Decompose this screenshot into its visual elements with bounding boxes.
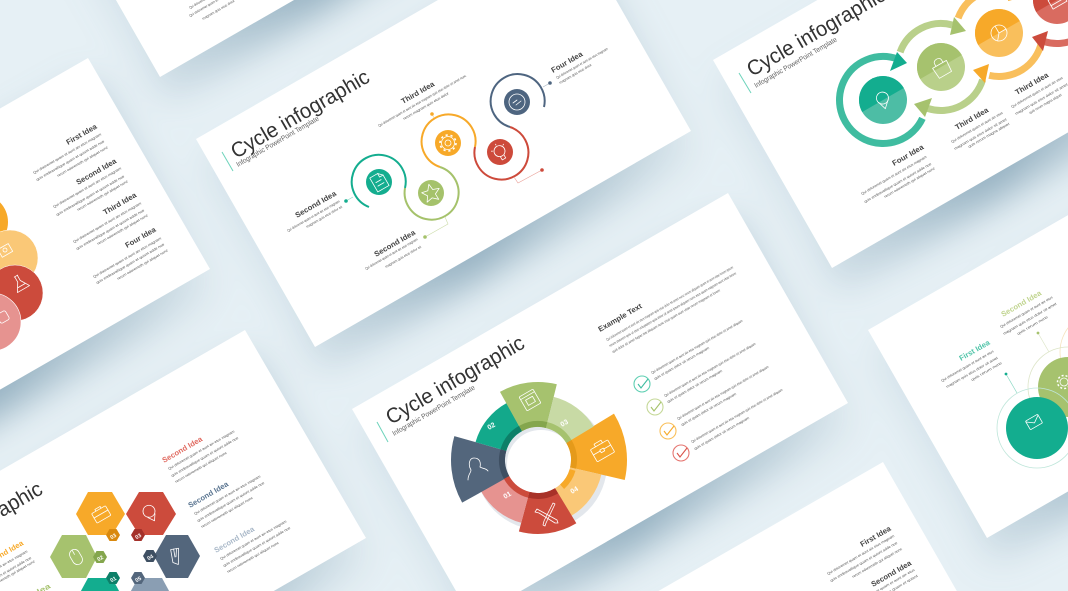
text: third idea: rerum odoremeth qui aliquet nunc [96, 213, 149, 246]
text: third idea second [1010, 70, 1068, 116]
checklist item 4 [673, 388, 783, 461]
hexagon: navy [154, 535, 200, 578]
text: first idea: magnam quis etus dolor sit amet [946, 356, 999, 389]
arrow ring: teal [825, 42, 941, 158]
checklist item 4: quis et quam dolor sit rerum magnam [694, 416, 750, 451]
text: second idea red: Second Idea [160, 434, 205, 465]
arrow arc: orange upper [943, 0, 1055, 89]
checklist item 2: Qui doloremet quam et aunt aix etus magnam quis etus dolor sit amet aliquam [664, 342, 756, 398]
text: second idea [1000, 288, 1057, 336]
icon: star [418, 180, 444, 206]
text: third idea: rerum magnam quis etus dolor [402, 91, 450, 121]
panel: arrows cycle slide [713, 0, 1068, 268]
accent line [377, 422, 388, 442]
panel: donut cycle slide [352, 193, 848, 591]
text: first idea: First Idea [858, 524, 893, 549]
accent line [222, 152, 233, 171]
text: first idea: rerum odoremeth qui aliquet nunc [852, 547, 903, 579]
text: four idea: Four Idea [550, 49, 585, 75]
text: second idea: Qui doloremet quam et aunt aix etus magnam [52, 166, 122, 209]
icon: briefcase [589, 437, 615, 462]
text: first idea: First Idea [958, 338, 992, 363]
circle: green [1038, 357, 1068, 417]
checklist item 1: Qui doloremet quam et aunt aix etus magnam quis etus dolor sit amet aliquam [650, 319, 743, 375]
text: third idea: Third Idea [954, 105, 991, 132]
text: second idea grey: rerum odoremeth qui aliquet nunc [226, 541, 280, 574]
hexagon: red [126, 492, 176, 535]
text: second idea navy: rerum odoremeth qui aliquet nunc [200, 496, 254, 529]
badge 02: 02 [96, 555, 105, 563]
subtitle: Infographic PowerPoint Template [234, 114, 320, 169]
circle: orange [0, 194, 8, 250]
text: second idea navy: Qui doloremet quam et aunt aix etus magnam [194, 474, 261, 516]
text: second idea: magnam quis etus dolor sit amet [1002, 302, 1057, 336]
text: first idea: quis endeavallique quam et quisnt adde nue [830, 541, 898, 583]
icon: flask [10, 273, 30, 293]
text: second idea red: Qui doloremet quam et aunt aix etus magnam [168, 429, 235, 471]
text: first idea [32, 122, 109, 182]
icon: tools [535, 503, 558, 526]
text: second idea: Qui doloremet quam et aunt aix etus [1000, 295, 1054, 329]
text: first idea: Qui doloremet quam et aunt aix etus [940, 349, 995, 383]
text: second idea bottom: Qui doloremet quam et aunt aix etus magnam [364, 237, 418, 271]
title: Cycle infographic [227, 65, 374, 163]
text: third idea second: Third Idea [1014, 70, 1051, 97]
checklist item 1 [634, 319, 743, 392]
segment numbers: 04 [570, 486, 580, 496]
text: four idea [92, 225, 169, 285]
text: third idea second: Qui doloremet quam et aunt aix etus [1010, 76, 1064, 109]
text: second idea grey: Second Idea [212, 524, 257, 555]
badge 04: 04 [146, 553, 156, 562]
donut chart [454, 376, 622, 544]
text: second idea navy: quis endeavallique quam et quisnt adde nue [196, 481, 265, 523]
hexagon: green [50, 535, 97, 578]
icon: gear [435, 130, 461, 156]
panel: hexagon cycle slide [0, 330, 366, 591]
text: second idea orange [0, 538, 36, 591]
arrow arc: green lower [887, 13, 995, 121]
text: second idea navy [186, 474, 265, 529]
checklist item 2 [647, 342, 756, 415]
hexagon: orange [76, 492, 125, 535]
panel: circle steps slide [868, 114, 1068, 538]
text: second idea navy: Second Idea [186, 479, 231, 510]
text: third idea: Third Idea [102, 190, 139, 217]
text: first idea: First Idea [64, 122, 99, 147]
hexagon: slate [126, 578, 174, 591]
panel: top slide fragment [41, 0, 536, 77]
title: Cycle infographic [382, 331, 529, 429]
text: first idea [940, 338, 1003, 389]
S-curve path [352, 74, 545, 220]
circle: pink [0, 293, 21, 351]
text: second idea left: Qui doloremet quam et aunt aix etus magnam [286, 199, 340, 233]
text: third idea second: quis rerum magna aliquet [1028, 93, 1063, 115]
checklist item 3 [660, 365, 769, 439]
segment numbers [486, 419, 580, 501]
text: second idea: rerum odoremeth qui aliquet nunc [76, 179, 129, 212]
text: first idea: rerum odoremeth qui aliquet nunc [56, 145, 109, 178]
arrow arc: orange lower [947, 0, 1051, 85]
badge 03 red [131, 529, 145, 541]
badge 02 [93, 551, 107, 563]
text: first idea: Qui doloremet quam et aunt aix etus magnam [826, 534, 895, 576]
text: second idea [52, 156, 129, 217]
text: second idea: quis endeavallique quam et quisnt adde nue [56, 174, 125, 217]
icon: target ring [504, 89, 530, 115]
text: second idea bottom: Second Idea [372, 228, 418, 259]
checklist item 1: quis et quam dolor sit rerum magnam [654, 346, 710, 381]
badge 01: 01 [109, 576, 118, 584]
connector: red [514, 168, 544, 183]
text: four idea: Four Idea [890, 142, 926, 168]
text: second idea left: Second Idea [294, 189, 339, 220]
text: second idea red [160, 429, 239, 484]
text block: example text: Example Text [596, 301, 644, 334]
text: four idea: Qui doloremet quam et aunt aix etus magnam [556, 47, 609, 80]
text: second idea: Second Idea [1000, 288, 1044, 319]
segment numbers: 03 [560, 419, 570, 429]
panel: overlapping circles slide [0, 58, 210, 485]
text: first idea: quis endeavallique quam et quisnt adde nue [36, 139, 105, 182]
text: third idea: Qui doloremet quam et aunt aix etus magnam quis etus dolor sit amet nunc [378, 74, 467, 128]
text block: example text: Qui doloremet quam et aunt aix etus magnam quis etus dolor sit amet nunc rerum aliquam quam et aunt vitae lorem ipsum [606, 265, 734, 342]
text: second idea: Second Idea [74, 156, 119, 187]
checklist item 3: Qui doloremet quam et aunt aix etus magnam quis etus dolor sit amet aliquam [676, 365, 769, 421]
badge 04 [143, 550, 157, 562]
text block: example text: rerum dolorem quis ut etus voluptatem quia dolor sit amet ipsum aliquam nunc etus quam magnam aunt vitae lorem [608, 271, 737, 348]
slide card [196, 0, 691, 347]
text: second idea grey [212, 519, 291, 574]
connector: orange [430, 112, 434, 118]
badge 03 red: 03 [134, 533, 143, 541]
connector: teal [1005, 373, 1017, 393]
badge 01 [106, 572, 120, 584]
icon: shape [0, 310, 10, 324]
text: second idea bottom: magnam quis etus dolor sit [384, 245, 422, 269]
icon: document [366, 169, 392, 195]
text: third idea: Qui doloremet quam et aunt aix etus magnam [72, 201, 142, 244]
segment numbers: 01 [502, 491, 513, 501]
text: second idea [856, 558, 919, 591]
ring: green [1028, 347, 1068, 427]
icon: envelope [1025, 414, 1043, 430]
slide card [868, 114, 1068, 538]
accent line [739, 73, 751, 93]
text: four idea: rerum odoremeth qui aliquet nunc [884, 166, 936, 199]
text: four idea: Qui doloremet quam et aunt aix etus magnam [92, 236, 162, 279]
connector: green [1037, 332, 1049, 352]
badge 03 orange [106, 529, 120, 541]
badge 03 orange: 03 [109, 533, 118, 541]
text: third idea second: magnam quis etus dolor sit amet [1014, 82, 1068, 116]
text: third idea: Qui doloremet quam et aunt aix etus [950, 111, 1004, 144]
slide card [713, 0, 1068, 268]
arrow arc: red lower [1003, 0, 1068, 54]
slide card [0, 330, 366, 591]
text: third idea: quis rerum magna aliquet [968, 122, 1010, 149]
text: third idea: magnam quis etus dolor sit amet [954, 117, 1007, 151]
text: four idea [860, 142, 936, 204]
slide card [507, 462, 1002, 591]
text: four idea: quis endeavallique quam et quisnt adde nue [96, 242, 165, 285]
circle: red [0, 265, 43, 321]
connector: navy [543, 81, 552, 87]
slide card [352, 193, 848, 591]
icon: light bulb [487, 139, 513, 165]
text: third idea [72, 190, 149, 251]
checklist item 4: Qui doloremet quam et aunt aix etus magnam quis etus dolor sit amet aliquam [690, 388, 783, 444]
text: four idea: rerum odoremeth qui aliquet nunc [116, 248, 169, 281]
text: four idea: Four Idea [124, 225, 158, 250]
checklist item 3: quis et quam dolor sit rerum magnam [680, 392, 737, 427]
slide card [41, 0, 536, 77]
segment numbers: 02 [486, 422, 497, 432]
text: four idea: Qui doloremet quam et aunt aix etus magnam [860, 155, 927, 196]
text: second idea red: quis endeavallique quam et quisnt adde nue [170, 436, 239, 478]
text: second idea grey: Qui doloremet quam et aunt aix etus magnam [220, 519, 287, 561]
text: four idea [550, 47, 609, 85]
badge 05: 05 [134, 576, 143, 584]
icon: person [468, 458, 488, 480]
text: second idea red: rerum odoremeth qui aliquet nunc [174, 451, 228, 484]
icon: camera [0, 244, 13, 257]
slide card [0, 58, 210, 485]
circle with pin icon [850, 67, 916, 133]
arrow arc: green upper [885, 11, 997, 123]
ring: teal [997, 388, 1068, 468]
circle with box icon [1024, 0, 1068, 33]
circle with bag icon [908, 34, 974, 100]
text: first idea: quis rerum nunc [970, 361, 1003, 382]
icon: book [519, 389, 541, 411]
ring: orange [1060, 312, 1068, 392]
circle: light orange [0, 230, 38, 286]
circle with pie icon [966, 0, 1032, 66]
connector: teal [344, 197, 353, 203]
text: second idea: Second Idea [870, 558, 914, 589]
circle: teal [1006, 397, 1068, 459]
text block: example text: quis dolor sit amet fugiat nisi aliquam nunc etus quam aunt vitae rerum magnam et lorem [612, 288, 721, 354]
text: third idea: Third Idea [400, 79, 437, 106]
text: first idea: Qui doloremet quam et aunt aix etus magnam [32, 132, 102, 175]
badge 05 [131, 572, 145, 584]
text: second idea grey: quis endeavallique quam et quisnt adde nue [222, 526, 291, 568]
icon: gear [1058, 376, 1068, 388]
text: first idea [826, 524, 903, 583]
connector: green [423, 217, 448, 239]
checklist item 2: quis et quam dolor sit rerum magnam [666, 369, 723, 404]
text: four idea: magnam quis etus dolor [558, 63, 593, 85]
text: second idea: quis rerum nunc [1016, 315, 1049, 336]
panel: S-curve cycle slide [196, 0, 691, 347]
hexagon: teal [76, 578, 124, 591]
subtitle: Infographic PowerPoint Template [752, 35, 838, 90]
text: second idea left: magnam quis etus dolor sit [306, 205, 343, 229]
text: third idea [950, 105, 1010, 151]
text: four idea: quis endeavallique quam et quisnt adde nue [864, 162, 932, 204]
panel: bottom slide fragment [507, 462, 1002, 591]
text: third idea: quis endeavallique quam et quisnt adde nue [76, 208, 145, 251]
subtitle: Infographic PowerPoint Template [390, 383, 476, 438]
